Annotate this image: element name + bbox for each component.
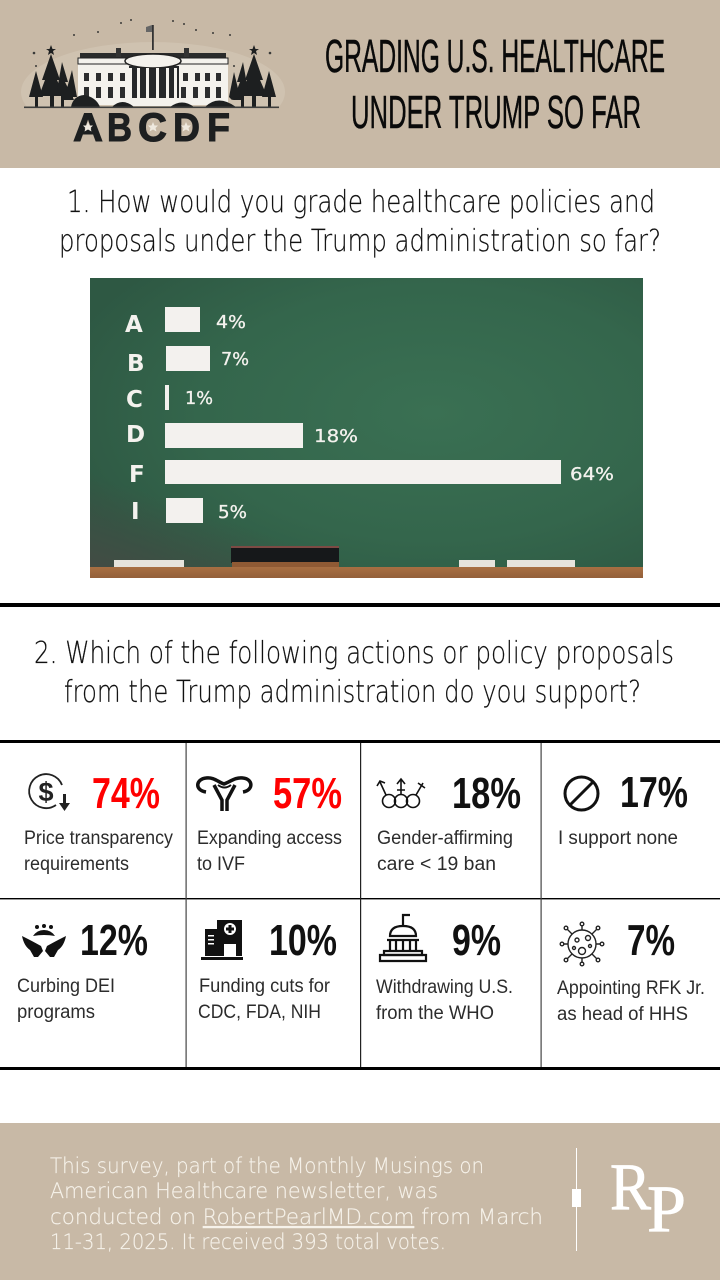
bushes and ground bbox=[24, 95, 279, 108]
cell: gender-affirming care: 18% bbox=[452, 769, 521, 818]
icon: dollar with down arrow: $ bbox=[38, 777, 54, 807]
grade letters: I bbox=[131, 499, 140, 525]
logo: RP monogram: P bbox=[647, 1172, 686, 1246]
bar values: 18% bbox=[314, 426, 358, 447]
bar values bbox=[185, 312, 614, 523]
cell: DEI: 12% bbox=[80, 916, 148, 965]
question 1 heading bbox=[59, 185, 661, 259]
question 2 heading bbox=[34, 636, 674, 710]
eraser bbox=[231, 546, 339, 567]
building bbox=[78, 48, 228, 106]
trees right bbox=[229, 45, 276, 107]
cell: DEI bbox=[17, 916, 148, 1023]
grade letters: C bbox=[126, 387, 143, 413]
grade letters bbox=[125, 312, 145, 525]
icon: uterus bbox=[198, 778, 251, 811]
title bbox=[325, 30, 665, 138]
cell: RFK bbox=[557, 916, 705, 1025]
cell: price transparency bbox=[24, 769, 173, 875]
cell: RFK: Appointing RFK Jr. bbox=[557, 978, 705, 999]
cell: IVF: Expanding access bbox=[197, 828, 342, 849]
cell: WHO bbox=[376, 915, 513, 1024]
sky stars bbox=[33, 19, 271, 67]
grade letters: A bbox=[73, 106, 103, 150]
cell: none bbox=[558, 768, 688, 849]
header band bbox=[0, 0, 720, 168]
icon: capitol bbox=[380, 915, 426, 961]
icon: hospital building bbox=[201, 920, 243, 960]
trees left bbox=[29, 45, 77, 107]
survey note: This survey, part of the Monthly Musings on bbox=[50, 1154, 484, 1178]
cell: IVF: 57% bbox=[273, 769, 342, 818]
chalk pieces bbox=[114, 560, 575, 567]
icon: gender symbols bbox=[377, 779, 425, 808]
footer band bbox=[0, 1123, 720, 1280]
bars bbox=[165, 307, 561, 523]
grade letters: D bbox=[126, 422, 145, 448]
cell: gender-affirming care: care < 19 ban bbox=[377, 854, 496, 875]
panel: support table bbox=[0, 740, 720, 1070]
grade letters: A bbox=[125, 312, 143, 338]
grade letters: B bbox=[107, 106, 132, 150]
cell: funding cuts: CDC, FDA, NIH bbox=[198, 1002, 321, 1023]
icon: hands holding people bbox=[22, 924, 66, 957]
flag bbox=[146, 25, 154, 50]
grade letters: C bbox=[138, 106, 167, 150]
cell: WHO: 9% bbox=[452, 916, 501, 965]
bar values: 7% bbox=[221, 349, 249, 370]
bar values: 5% bbox=[218, 502, 247, 523]
bar values: 64% bbox=[570, 464, 614, 485]
grade letters: B bbox=[127, 351, 145, 377]
icon: prohibited sign bbox=[565, 777, 598, 810]
survey note: American Healthcare newsletter, was bbox=[50, 1179, 438, 1203]
cell: none: 17% bbox=[620, 768, 688, 817]
panel: chalkboard bar chart bbox=[90, 278, 643, 578]
logo: RP monogram: R bbox=[610, 1150, 651, 1224]
bar values: 1% bbox=[185, 388, 213, 409]
cell: funding cuts: Funding cuts for bbox=[199, 976, 331, 997]
grade letters bbox=[73, 106, 230, 150]
icon: virus bbox=[560, 922, 604, 966]
grade letters: F bbox=[129, 462, 145, 488]
cell: gender-affirming care bbox=[377, 769, 521, 875]
cell: none: I support none bbox=[558, 828, 678, 849]
grade letters: D bbox=[173, 106, 200, 150]
cell: DEI: Curbing DEI bbox=[17, 976, 115, 997]
logo: RP monogram bbox=[610, 1150, 686, 1246]
bar values: 4% bbox=[216, 312, 246, 333]
cell: IVF bbox=[197, 769, 342, 875]
cell: WHO: from the WHO bbox=[376, 1003, 494, 1024]
survey note: 11-31, 2025. It received 393 total votes. bbox=[50, 1230, 446, 1254]
cell: IVF: to IVF bbox=[197, 854, 245, 875]
cell: price transparency: requirements bbox=[24, 854, 129, 875]
logo: White House with ABCDF grades bbox=[0, 19, 320, 157]
footer divider bbox=[572, 1148, 581, 1251]
cell: price transparency: 74% bbox=[92, 769, 160, 818]
cell: WHO: Withdrawing U.S. bbox=[376, 977, 513, 998]
cell: funding cuts: 10% bbox=[269, 916, 337, 965]
cell: RFK: 7% bbox=[627, 916, 675, 965]
survey note: conducted on RobertPearlMD.com from March bbox=[50, 1205, 543, 1229]
cell: price transparency: Price transparency bbox=[24, 828, 173, 849]
cell: RFK: as head of HHS bbox=[557, 1004, 688, 1025]
survey note bbox=[50, 1154, 543, 1254]
cell: DEI: programs bbox=[17, 1002, 95, 1023]
cell: gender-affirming care: Gender-affirming bbox=[377, 828, 513, 849]
grade letters: F bbox=[207, 106, 230, 150]
chalk tray bbox=[90, 567, 643, 578]
cell: funding cuts bbox=[198, 916, 337, 1023]
icon: dollar with down arrow bbox=[29, 774, 70, 811]
